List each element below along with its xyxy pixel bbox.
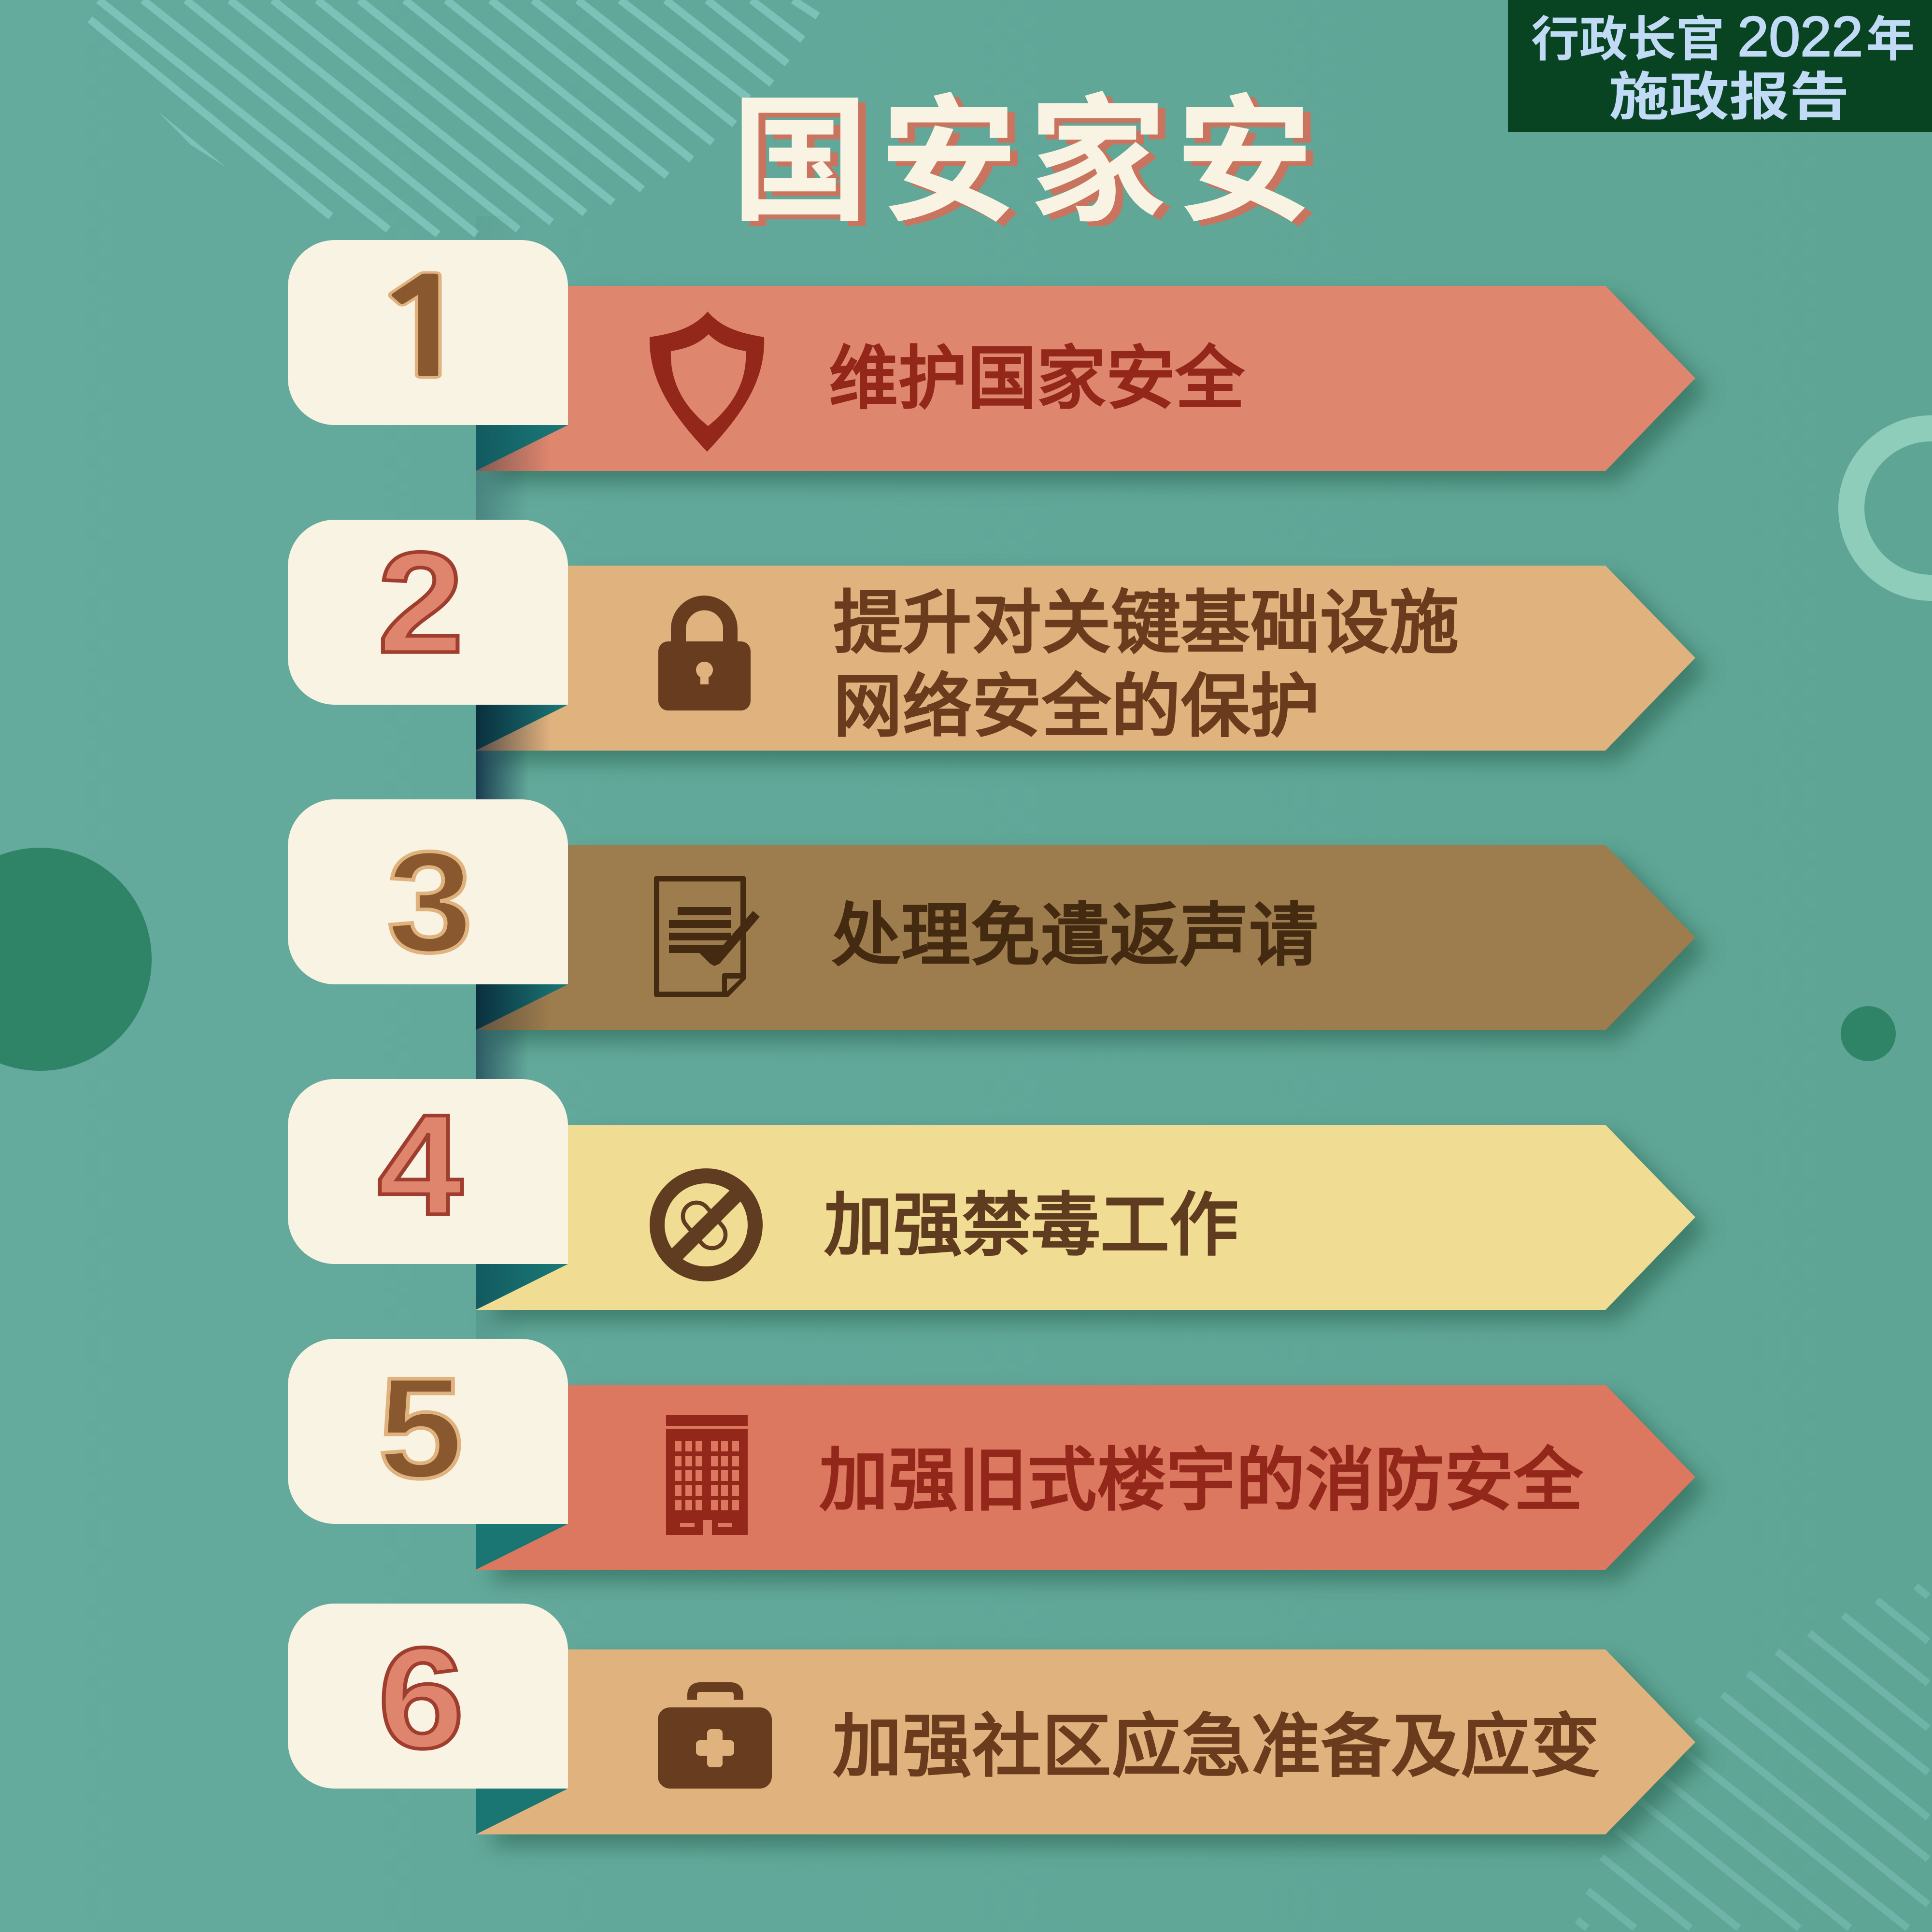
- number 6: 6: [378, 1618, 464, 1778]
- title: 安: [1183, 90, 1321, 243]
- large circle decoration left: [0, 848, 152, 1071]
- number card 6: [288, 1604, 568, 1789]
- item 6: community emergency preparedness: [288, 1604, 1708, 1846]
- number 3: 3: [387, 822, 473, 982]
- icon: padlock: [658, 596, 751, 710]
- icon: document with check: [654, 876, 760, 997]
- text 5: 加强旧式楼宇的消防安全: [819, 1442, 1583, 1519]
- diagonal stripes bottom right: [1577, 1586, 1928, 1928]
- text 4: 加强禁毒工作: [824, 1187, 1238, 1264]
- badge: policy address 2022: 行政长官: [1531, 13, 1724, 67]
- title: 安: [880, 85, 1018, 239]
- text 3: 处理免遣返声请: [832, 897, 1319, 974]
- text 2 line 2: 网络安全的保护: [833, 668, 1320, 745]
- title: [731, 85, 1321, 243]
- number card 5: [288, 1339, 568, 1524]
- title: 安: [888, 90, 1025, 243]
- item 1: safeguard national security: [288, 240, 1708, 520]
- number card 1: [288, 240, 568, 425]
- icon: shield: [650, 312, 764, 452]
- diagonal stripes top left: [90, 0, 818, 234]
- small circle decoration right: [1841, 1006, 1896, 1061]
- item 2: critical infrastructure cyber protection: [288, 520, 1708, 799]
- icon: first aid kit: [658, 1687, 772, 1789]
- item 4: anti-drug work: [288, 1079, 1708, 1339]
- ring decoration right: [1851, 428, 1932, 588]
- title: 家: [1037, 90, 1174, 243]
- badge: policy address 2022: 年: [1866, 13, 1915, 67]
- badge: policy address 2022: 2022: [1737, 5, 1863, 68]
- item 3: non-refoulement claims: [288, 799, 1708, 1079]
- badge: policy address 2022: 施政报告: [1609, 68, 1849, 126]
- number 2: 2: [378, 522, 464, 682]
- number 5: 5: [378, 1349, 463, 1508]
- number 4: 4: [378, 1085, 464, 1245]
- text 1: 维护国家安全: [829, 341, 1245, 417]
- number 1: 1: [368, 263, 481, 396]
- badge: policy address 2022: [1508, 0, 1932, 132]
- title: 国: [739, 90, 877, 243]
- title: 国: [731, 85, 869, 239]
- number 1: 1: [368, 263, 481, 396]
- text 2: 提升对关键基础设施: [833, 585, 1459, 662]
- item 5: fire safety of old buildings: [288, 1339, 1708, 1581]
- icon: no drugs: [657, 1176, 755, 1274]
- number card 3: [288, 799, 568, 984]
- number card 2: [288, 520, 568, 705]
- icon: building: [666, 1415, 748, 1535]
- number card 4: [288, 1079, 568, 1264]
- title: 家: [1029, 85, 1166, 239]
- title: 安: [1176, 85, 1313, 239]
- text 6: 加强社区应急准备及应变: [833, 1708, 1601, 1785]
